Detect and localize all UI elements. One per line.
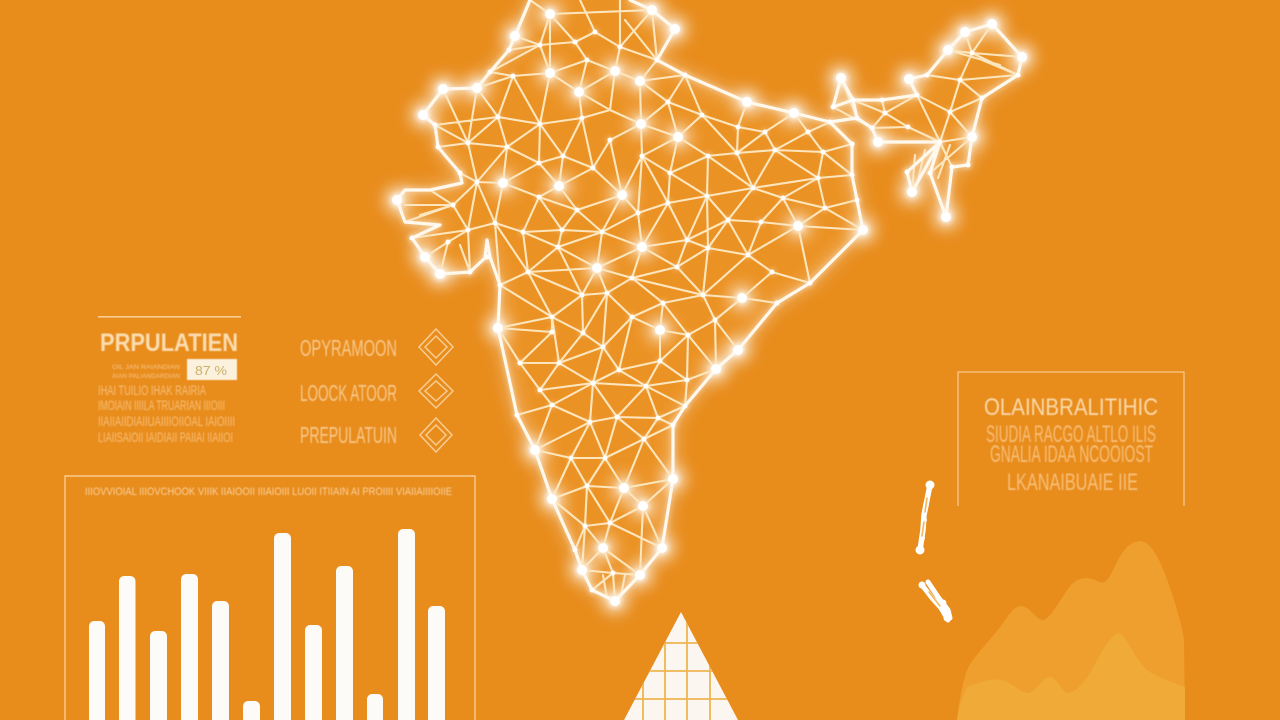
area chart bbox=[957, 541, 1185, 720]
icon: diamond 3 bbox=[420, 418, 452, 452]
mesh nodes bbox=[397, 10, 1022, 601]
mesh outline bbox=[397, 0, 1022, 601]
panel body lines: GNALIA IDAA NCOOIOST bbox=[990, 441, 1153, 468]
value badge bbox=[187, 359, 237, 380]
panel: bar chart bbox=[65, 476, 475, 720]
body text: IIAIIAIIDIAIIUAIIIIOIIOAL IAIOIIII bbox=[98, 413, 235, 429]
icon: diamond 2 bbox=[419, 374, 453, 408]
legend label 2: LOOCK ATOOR bbox=[300, 380, 397, 406]
legend label 1: OPYRAMOON bbox=[300, 335, 397, 361]
panel body lines: SIUDIA RACGO ALTLO ILIS bbox=[986, 421, 1156, 448]
body text: IHAI TUILIO IHAK RAIRIA bbox=[98, 382, 206, 398]
small caption lines: OIL JAN RAIANDIAN bbox=[112, 364, 180, 371]
islands: Nicobar chain bbox=[922, 582, 950, 620]
heading: PRPULATIEN bbox=[100, 329, 238, 357]
panel body lines: LKANAIBUAIE IIE bbox=[1007, 469, 1138, 496]
icon: diamond 1 bbox=[419, 329, 453, 365]
map glow halo bbox=[397, 0, 1022, 601]
mesh inner edges bbox=[405, 0, 1022, 601]
body text: IMOIAIN IIIILA TRUARIAN IIIOIII bbox=[98, 397, 225, 413]
body text bbox=[98, 382, 235, 445]
front area bbox=[957, 633, 1185, 720]
panel heading: OLAINBRALITIHIC bbox=[984, 394, 1158, 421]
islands: Andaman chain bbox=[920, 485, 930, 550]
panel rule bbox=[98, 316, 241, 318]
legend label 3: PREPULATUIN bbox=[300, 422, 397, 448]
text frame bbox=[958, 372, 1184, 506]
chart caption: IIIOVVIOIAL IIIOVCHOOK VIIIK IIAIOOII IIIAIOIII LUOII ITIIAIN AI PROIIII VIAIIAIIIIOIIE bbox=[85, 486, 452, 498]
legend: three labels with diamond icons bbox=[300, 329, 453, 452]
bars bbox=[89, 529, 445, 720]
value badge: 87 % bbox=[195, 363, 227, 378]
small caption lines bbox=[112, 364, 180, 380]
body text: LIAIISAIOII IAIDIAII PAIIAI IIAIIOI bbox=[98, 429, 233, 445]
pyramid chart bbox=[624, 612, 738, 720]
panel: demographic text bbox=[958, 372, 1184, 506]
panel: population summary bbox=[98, 316, 241, 445]
map interior tint bbox=[397, 0, 1022, 601]
small caption lines: AIAN PALIANDARDIAN bbox=[112, 373, 180, 380]
chart frame bbox=[65, 476, 475, 720]
back area bbox=[957, 541, 1185, 720]
map of India: glowing polygon mesh bbox=[397, 0, 1022, 601]
panel body lines bbox=[986, 421, 1156, 496]
